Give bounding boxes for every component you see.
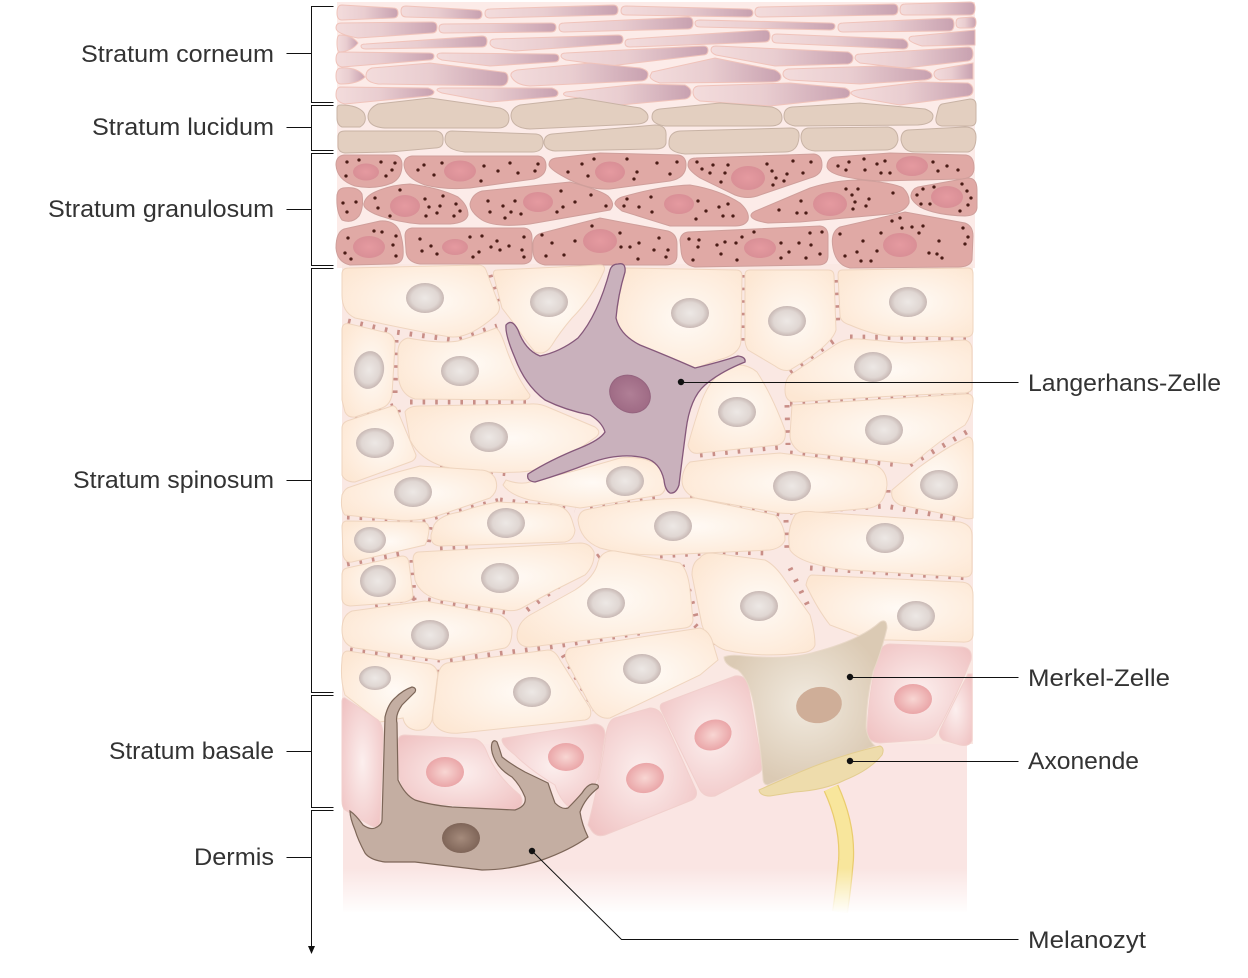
bracket: Stratum corneum — [81, 6, 334, 102]
epidermis intercellular background — [337, 2, 975, 744]
arrow: Dermis depth — [194, 810, 334, 954]
callout: Axonende — [847, 748, 1139, 775]
spinous cell nuclei — [351, 283, 958, 707]
layer: stratum granulosum cells — [336, 153, 977, 268]
melanocyte — [350, 687, 598, 870]
dermis fade to white — [335, 868, 975, 914]
bracket: Stratum granulosum — [48, 154, 334, 266]
callout: Langerhans-Zelle — [678, 370, 1221, 397]
Langerhans cell — [506, 264, 745, 493]
layer: stratum lucidum cells — [337, 98, 976, 154]
callout: Melanozyt: Melanozyt — [1028, 927, 1146, 954]
callout: Merkel-Zelle: Merkel-Zelle — [1028, 665, 1170, 692]
bracket: Stratum lucidum: Stratum lucidum — [92, 114, 274, 141]
layer: stratum basale cells — [342, 644, 972, 836]
layer: stratum spinosum cells — [341, 265, 973, 733]
callout: Merkel-Zelle — [847, 665, 1170, 692]
keratohyalin granules — [343, 159, 971, 261]
bracket: Stratum granulosum: Stratum granulosum — [48, 196, 274, 223]
bracket: Stratum basale: Stratum basale — [109, 738, 274, 765]
layer: stratum corneum cells — [336, 2, 976, 106]
bracket: Stratum spinosum: Stratum spinosum — [73, 467, 274, 494]
arrow: Dermis depth: Dermis — [194, 844, 274, 871]
axon ending — [759, 746, 883, 796]
callout: Melanozyt — [529, 848, 1146, 954]
desmosome bridges between spinous cells — [347, 275, 970, 720]
callout: Axonende: Axonende — [1028, 748, 1139, 775]
dermis background — [343, 700, 967, 912]
Merkel cell — [724, 621, 887, 785]
bracket: Stratum corneum: Stratum corneum — [81, 41, 274, 68]
bracket: Stratum spinosum — [73, 268, 334, 692]
callout: Langerhans-Zelle: Langerhans-Zelle — [1028, 370, 1221, 397]
bracket: Stratum lucidum — [92, 106, 334, 150]
nerve fibre — [831, 788, 846, 912]
bracket: Stratum basale — [109, 696, 334, 808]
